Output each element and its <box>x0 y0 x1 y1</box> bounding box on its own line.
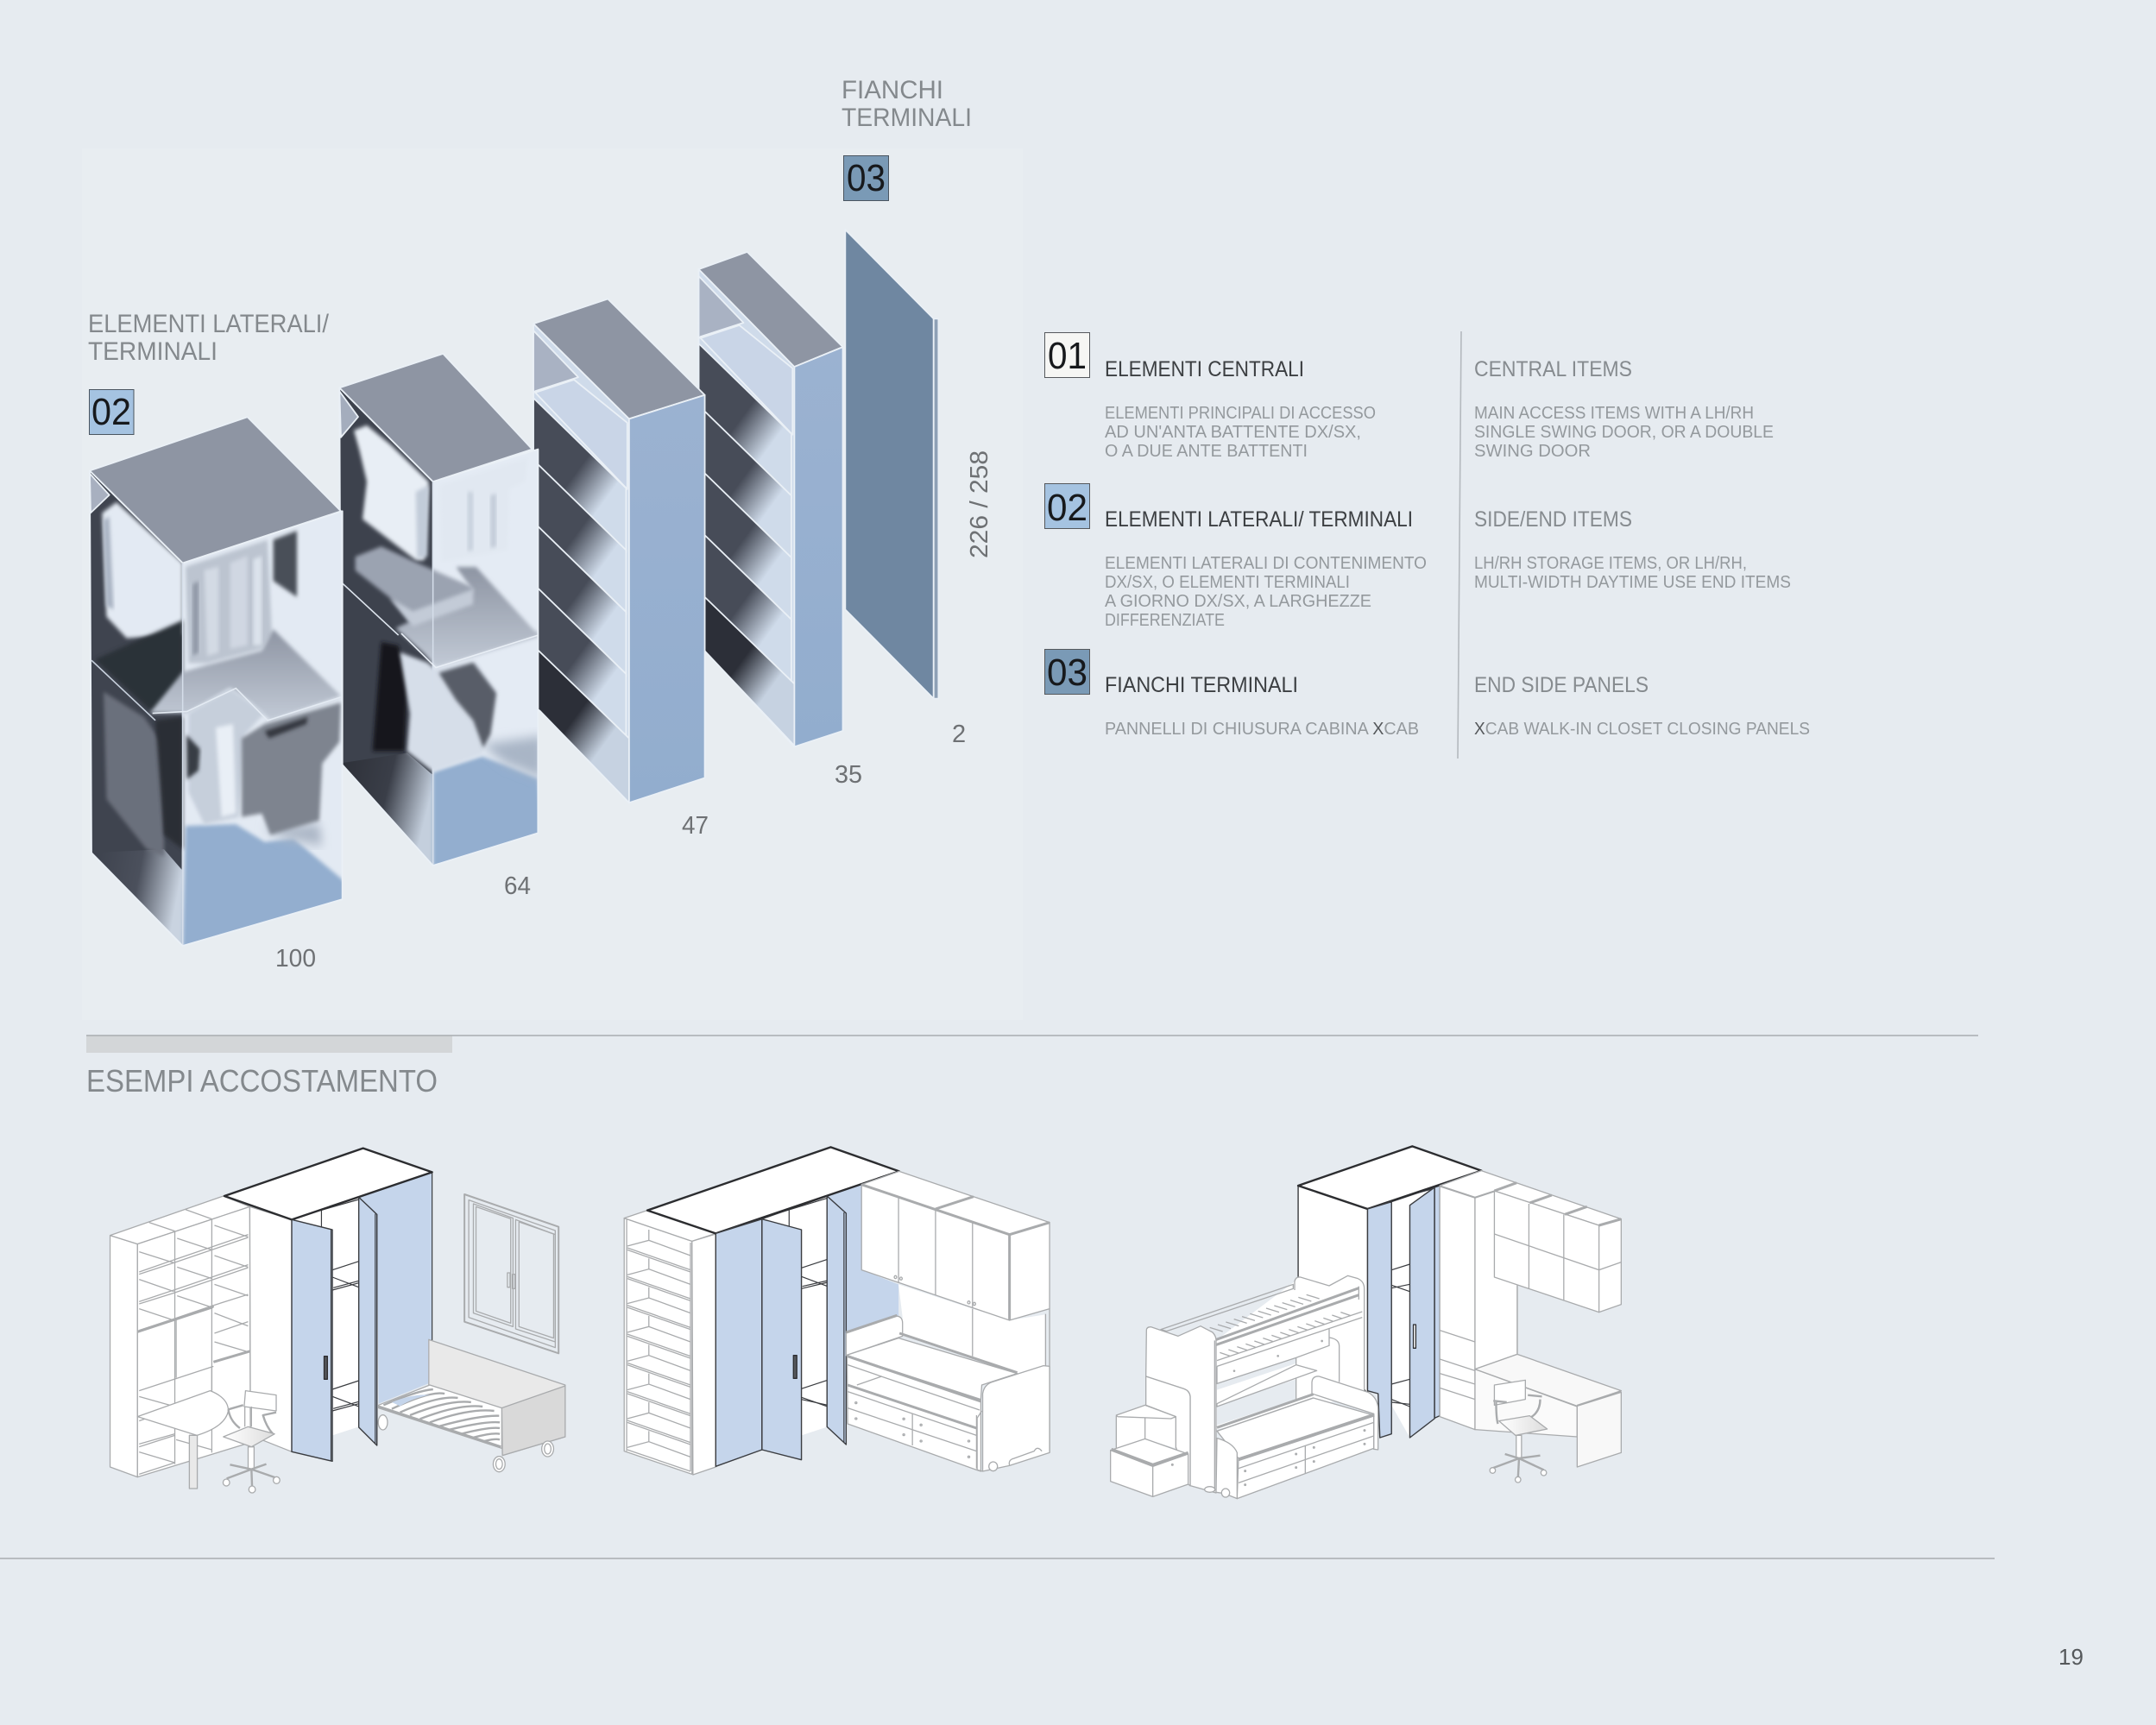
upper white shirt <box>354 425 429 560</box>
bed <box>378 1339 565 1472</box>
legend row 01: AD UN'ANTA BATTENTE DX/SX, <box>1105 423 1361 442</box>
garments and shelf <box>341 425 542 871</box>
right door <box>827 1196 846 1445</box>
legend row 01 <box>1044 333 1774 461</box>
shelf with folded box <box>395 567 542 668</box>
lower centre pale shirt <box>188 689 265 824</box>
hanging cabinets <box>1440 1171 1621 1354</box>
folding door right <box>359 1197 377 1445</box>
upper left white shirt <box>102 502 183 638</box>
legend row 02 <box>1044 483 1791 630</box>
example 3: wardrobe with tall unit, cabinets, desk and chair <box>1298 1146 1621 1483</box>
upper bed slats and rails <box>1161 1284 1362 1366</box>
wardrobe back and interior <box>762 1185 898 1435</box>
legend row 01: SINGLE SWING DOOR, OR A DOUBLE <box>1474 423 1774 442</box>
legend row 03 <box>1044 649 1810 739</box>
shelf <box>149 629 341 721</box>
bookcase <box>110 1196 250 1477</box>
lighter backdrop behind exploded view <box>82 148 1023 1020</box>
legend row 02: 02 <box>1047 487 1087 529</box>
wardrobe doors <box>1367 1187 1434 1438</box>
top and edges <box>339 354 533 482</box>
legend row 01: MAIN ACCESS ITEMS WITH A LH/RH <box>1474 404 1754 423</box>
stair steps <box>1111 1405 1215 1496</box>
example 1: wardrobe with bookcase, desk, window and bed <box>110 1149 565 1493</box>
module: shelving unit 47 <box>533 299 705 803</box>
dimension labels: 100 <box>275 945 316 973</box>
overhead cabinets <box>861 1171 1050 1320</box>
legend row 02: DIFFERENZIATE <box>1105 611 1225 630</box>
dark hanging garment <box>373 642 407 752</box>
blue end panel base <box>183 824 347 951</box>
legend row 02: LH/RH STORAGE ITEMS, OR LH/RH, <box>1474 554 1747 573</box>
office chair <box>223 1391 280 1493</box>
heading: fianchi terminali <box>842 76 972 132</box>
lower wall and bed <box>846 1284 1050 1471</box>
tall side unit <box>1434 1184 1517 1430</box>
upper bed headboard and support <box>1216 1275 1365 1430</box>
legend row 03: 03 <box>1047 652 1087 694</box>
example 2: wardrobe with bookcase, overhead cabinets and bed <box>624 1147 1050 1475</box>
legend row 03: FIANCHI TERMINALI <box>1105 673 1298 697</box>
heading: fianchi terminali: FIANCHI <box>842 76 943 104</box>
floor shading <box>341 753 433 866</box>
legend row 01: O A DUE ANTE BATTENTI <box>1105 442 1308 461</box>
heading: elementi laterali terminali: TERMINALI <box>88 337 217 366</box>
section heading: ESEMPI ACCOSTAMENTO <box>86 1063 438 1099</box>
badge 02: 02 <box>91 391 131 433</box>
legend row 03: XCAB WALK-IN CLOSET CLOSING PANELS <box>1474 720 1810 739</box>
legend row 03: PANNELLI DI CHIUSURA CABINA XCAB <box>1105 720 1419 739</box>
dimension labels: 226 / 258 <box>966 450 993 558</box>
window <box>464 1194 558 1353</box>
heading: elementi laterali terminali: ELEMENTI LATERALI/ <box>88 310 330 338</box>
left door pair <box>716 1219 802 1466</box>
legend row 01: 01 <box>1048 335 1087 377</box>
wardrobe top <box>1298 1146 1481 1209</box>
top and edges <box>90 417 341 563</box>
legend row 01: ELEMENTI PRINCIPALI DI ACCESSO <box>1105 404 1376 423</box>
desk <box>1475 1354 1621 1467</box>
heading: elementi laterali terminali <box>88 310 330 366</box>
lower left grey shirt <box>104 692 164 856</box>
legend row 01: SWING DOOR <box>1474 442 1591 461</box>
stair side panel <box>1146 1326 1216 1493</box>
legend row 02: MULTI-WIDTH DAYTIME USE END ITEMS <box>1474 573 1791 592</box>
module: wardrobe unit 100 <box>90 417 347 951</box>
blue end panel base <box>433 756 542 871</box>
legend row 02: DX/SX, O ELEMENTI TERMINALI <box>1105 573 1350 592</box>
legend row 01: CENTRAL ITEMS <box>1474 357 1632 381</box>
desk <box>137 1391 229 1489</box>
dimension labels: 2 <box>952 721 966 748</box>
badge 03: 03 <box>847 157 886 199</box>
office chair <box>1490 1380 1548 1483</box>
folding door left <box>292 1219 332 1461</box>
under-bed panel and shelf <box>1217 1329 1329 1426</box>
module: end panel 2 <box>845 230 938 699</box>
dark sleeve <box>274 531 297 597</box>
dimension labels <box>275 450 993 973</box>
dimension labels: 47 <box>682 812 709 840</box>
legend row 02: ELEMENTI LATERALI/ TERMINALI <box>1105 507 1413 532</box>
lower bed <box>1216 1376 1378 1499</box>
legend row 03: END SIDE PANELS <box>1474 673 1649 697</box>
wardrobe side and back <box>249 1172 432 1451</box>
wardrobe body <box>1298 1186 1434 1438</box>
legend row 02: SIDE/END ITEMS <box>1474 507 1632 532</box>
floor shading <box>91 849 183 946</box>
dimension labels: 64 <box>504 872 531 900</box>
exploded furniture: panel and shelving modules <box>533 230 938 803</box>
heading: fianchi terminali: TERMINALI <box>842 104 972 132</box>
legend row 02: ELEMENTI LATERALI DI CONTENIMENTO <box>1105 554 1427 573</box>
module: wardrobe unit 64 <box>339 354 542 871</box>
dimension labels: 35 <box>835 761 862 789</box>
bookcase <box>624 1211 716 1475</box>
wardrobe top <box>224 1149 432 1219</box>
lower right grey shirt <box>242 702 341 835</box>
upper centre shirt <box>186 539 272 664</box>
module: shelving unit 35 <box>699 252 843 746</box>
dark recess above shelf <box>95 620 183 709</box>
example 3: bunk bed with stairs and drawers <box>1111 1275 1378 1499</box>
legend row 01: ELEMENTI CENTRALI <box>1105 357 1304 381</box>
page number: 19 <box>2058 1644 2084 1670</box>
legend row 02: A GIORNO DX/SX, A LARGHEZZE <box>1105 592 1371 611</box>
garments and shelf <box>91 502 347 951</box>
pale hanging garment <box>400 652 496 771</box>
wardrobe top <box>647 1147 899 1233</box>
